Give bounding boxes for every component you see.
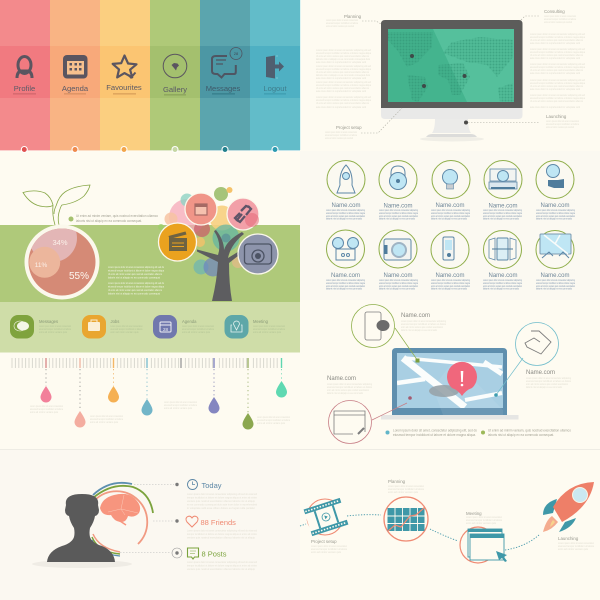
item: jobs <box>82 315 143 338</box>
icon: compact camera <box>379 230 417 268</box>
stat: posts: 8 Posts <box>202 550 227 558</box>
drop: rose <box>40 369 52 403</box>
text block: right column: eiusmod tempor incididunt ut labore et dolore magna aliqua <box>530 65 585 69</box>
text block: paragraph on green: Ut enim ad minim veniam quis nostrud exercitation ullamco <box>108 272 162 276</box>
text block: plant caption: laboris nisi ut aliquip ex ea commodo consequat. <box>76 219 142 223</box>
text block: paragraph on green: eiusmod tempor incididunt ut labore et dolore magna aliqua <box>108 268 164 272</box>
stat: today: in voluptate velit esse cillum dolore eu fugiat nulla pariatur <box>187 506 255 510</box>
item: messages: enim ad minim veniam quis <box>39 330 68 334</box>
map markers <box>410 54 466 88</box>
callout: planning <box>326 14 381 28</box>
menu item: logout <box>263 56 287 95</box>
text block: left column: aute irure dolor in reprehenderit in voluptate velit <box>316 60 366 64</box>
text blocks: icon captions: eiusmod tempor incididunt ut labore dolore magna <box>431 211 470 215</box>
callout: launching <box>464 114 579 129</box>
text blocks: icon captions: Lorem ipsum dolor sit amet consectetur adipiscing <box>536 278 575 282</box>
menu item: messages <box>206 48 242 95</box>
text block: left column: eiusmod tempor incididunt ut labore et dolore magna aliqua <box>316 51 371 55</box>
text block: left column: eiusmod tempor incididunt ut labore et dolore magna aliqua <box>316 98 371 102</box>
text block: left column: eiusmod tempor incididunt ut labore et dolore magna aliqua <box>316 83 371 87</box>
text blocks: drop captions: enim ad minim veniam quis <box>257 421 286 425</box>
callout: launching: Lorem ipsum dolor sit amet consectetur <box>546 119 579 123</box>
text blocks: icon captions: enim ad minim veniam quis nostrud exercitation <box>326 214 365 218</box>
head silhouette <box>32 494 132 568</box>
drop: green <box>242 369 254 430</box>
text block: legend captions: Lorem ipsum dolor sit amet, consectetur adipiscing elit, sed do <box>393 428 477 432</box>
label: name 9: Name.com <box>488 273 518 279</box>
tree icon: camera <box>238 234 278 274</box>
step: project setup <box>304 498 348 554</box>
item: messages <box>10 315 71 338</box>
text block: name right: Name.com <box>526 370 555 376</box>
text block: right column: Lorem ipsum dolor sit amet consectetur adipiscing elit sed <box>530 78 585 82</box>
drop: orange <box>108 369 119 403</box>
step: planning: eiusmod tempor incididunt ut labore <box>388 487 424 491</box>
text blocks: icon captions: eiusmod tempor incididunt ut labore dolore magna <box>536 281 575 285</box>
callout: project setup <box>325 108 402 140</box>
text block: legend captions: laboris nisi ut aliquip ex ea commodo consequat. <box>488 433 554 437</box>
text block: paragraph on green <box>108 265 164 296</box>
callout: planning: Planning <box>344 14 362 19</box>
item: messages: Lorem ipsum dolor sit amet consectetur <box>39 324 71 328</box>
icon: padlock <box>379 160 417 198</box>
icon: reel recorder <box>326 230 364 268</box>
text blocks: icon captions: enim ad minim veniam quis nostrud exercitation <box>431 284 470 288</box>
text block: left column: aute irure dolor in reprehenderit in voluptate velit <box>316 76 366 80</box>
text block: left column: Ut enim ad minim veniam quis nostrud exercitation ullamco <box>316 54 369 58</box>
text blocks: drop captions: eiusmod tempor incididunt ut labore <box>30 407 63 411</box>
tree icon: link <box>227 198 259 230</box>
timeline ruler <box>12 358 277 368</box>
text block: legend captions: eiusmod tempor incididunt ut labore et dolore magna aliqua. <box>393 433 476 437</box>
text blocks: icon captions: enim ad minim veniam quis nostrud exercitation <box>431 214 470 218</box>
item: meeting: enim ad minim veniam quis <box>253 330 282 334</box>
callout: phone chat <box>352 304 420 362</box>
text block: name right: Lorem ipsum dolor sit amet consectetur adipiscing <box>526 376 571 380</box>
text block: left column: Ut enim ad minim veniam quis nostrud exercitation ullamco <box>316 70 369 74</box>
menu item: profile <box>13 56 36 95</box>
text block: right column: Ut enim ad minim veniam quis nostrud exercitation ullamco <box>530 53 583 57</box>
text block: plant caption <box>68 214 158 223</box>
label: name 7: Name.com <box>383 273 413 279</box>
menu item: logout: Logout <box>263 84 287 93</box>
tree trunk and branches <box>197 230 244 301</box>
label: name 6: Name.com <box>331 273 360 279</box>
panel: rocket process <box>300 479 594 563</box>
label: name 8: Name.com <box>435 273 465 279</box>
menu item: favourites: Favourites <box>106 83 142 92</box>
text block: name right: laboris nisi ut aliquip ex ea commodo <box>526 385 562 389</box>
menu markers <box>21 146 278 152</box>
text blocks: icon captions: laboris nisi ut aliquip ex ea commodo <box>431 286 467 290</box>
text block: name left: Lorem ipsum dolor sit amet consectetur adipiscing <box>327 382 372 386</box>
text block: name top: eiusmod tempor incididunt ut labore et dolore <box>401 322 446 326</box>
stat: today: tempor incididunt ut labore et dolore magna aliqua ut enim ad minim <box>187 496 257 500</box>
text block: name left: eiusmod tempor incididunt ut labore et dolore <box>327 385 372 389</box>
drop: peach <box>74 369 86 428</box>
text block: right column: eiusmod tempor incididunt ut labore et dolore magna aliqua <box>530 96 585 100</box>
callout: project setup: enim ad minim veniam quis nostrud <box>325 136 353 140</box>
icon: tablet map <box>536 230 574 268</box>
panel: drop timeline <box>12 358 290 430</box>
text block: paragraph on green: laboris nisi ut aliquip ex ea commodo consequat <box>108 276 160 280</box>
item: jobs: Jobs <box>110 319 119 324</box>
stat: friends: veniam quis nostrud exercitation ullamco laboris nisi ut aliquip <box>187 536 256 540</box>
step: project setup: enim ad minim veniam quis <box>311 550 342 554</box>
step: meeting: Meeting <box>466 511 482 516</box>
item: jobs: eiusmod tempor incididunt ut labore <box>110 327 143 331</box>
stat: today: Today <box>202 481 222 490</box>
text block: left column: Lorem ipsum dolor sit amet consectetur adipiscing elit sed <box>316 48 371 52</box>
step: launching rocket: Launching <box>558 536 579 541</box>
callout: project setup: eiusmod tempor incididunt ut labore <box>325 133 357 137</box>
callout: browser link <box>328 396 412 444</box>
text blocks: icon captions: enim ad minim veniam quis nostrud exercitation <box>483 214 522 218</box>
stat: friends: tempor incididunt ut labore et dolore magna aliqua ut enim ad minim <box>187 532 257 536</box>
callout: project setup: Project setup <box>336 125 362 130</box>
step: launching rocket: eiusmod tempor incididunt ut labore <box>558 544 594 548</box>
text blocks: icon captions <box>326 208 575 290</box>
text block: name right <box>526 370 571 389</box>
text block: name top: enim ad minim veniam quis nostrud exercitation <box>401 325 443 329</box>
text blocks: icon captions: Lorem ipsum dolor sit amet consectetur adipiscing <box>431 208 470 212</box>
item: agenda: Agenda <box>182 319 197 324</box>
callout: project setup: Lorem ipsum dolor sit amet consectetur <box>325 130 357 134</box>
callout: planning: eiusmod tempor incididunt ut labore <box>326 21 358 25</box>
text blocks: drop captions: Lorem ipsum dolor sit amet consectetur <box>90 414 123 418</box>
item: jobs: Lorem ipsum dolor sit amet consectetur <box>110 324 143 328</box>
text block: left column: laboris nisi ut aliquip ex ea commodo consequat duis <box>316 57 371 61</box>
text blocks: icon captions: enim ad minim veniam quis nostrud exercitation <box>483 284 522 288</box>
step: planning <box>384 479 428 541</box>
callout: consulting: eiusmod tempor incididunt ut labore <box>544 17 576 21</box>
text blocks: icon captions: laboris nisi ut aliquip ex ea commodo <box>379 216 415 220</box>
stat: friends: 88 Friends <box>200 518 236 527</box>
text blocks: icon captions: enim ad minim veniam quis nostrud exercitation <box>536 214 575 218</box>
text block: plant caption: Ut enim ad minim veniam, quis nostrud exercitation ullamco <box>76 214 158 218</box>
text block: left column: Lorem ipsum dolor sit amet consectetur adipiscing elit sed <box>316 95 371 99</box>
text blocks: drop captions: eiusmod tempor incididunt ut labore <box>90 417 123 421</box>
text blocks: icon captions: Lorem ipsum dolor sit amet consectetur adipiscing <box>326 208 365 212</box>
text blocks: drop captions: eiusmod tempor incididunt ut labore <box>257 418 290 422</box>
text block: right column <box>530 32 585 109</box>
step: launching rocket <box>543 482 594 551</box>
text block: paragraph on green: Lorem ipsum dolor sit amet consectetur adipiscing elit sed do <box>108 281 164 285</box>
text block: name left: enim ad minim veniam quis nostrud exercitation <box>327 388 369 392</box>
icon: media player <box>431 230 469 268</box>
panel: plant and tree infographic <box>0 185 300 302</box>
step: meeting <box>460 511 507 563</box>
text blocks: icon captions: Lorem ipsum dolor sit amet consectetur adipiscing <box>536 208 575 212</box>
icon: magnifier in hand <box>536 160 574 198</box>
pie chart <box>24 224 100 300</box>
text blocks: icon captions: eiusmod tempor incididunt ut labore dolore magna <box>379 211 418 215</box>
panel: icon grid <box>300 151 600 300</box>
menu item: messages: 28 <box>234 51 239 56</box>
timeline markers <box>46 358 282 368</box>
stat: friends <box>153 516 257 540</box>
item: agenda: Lorem ipsum dolor sit amet consectetur <box>182 324 214 328</box>
text blocks: icon captions: eiusmod tempor incididunt ut labore dolore magna <box>536 211 575 215</box>
callout: launching: eiusmod tempor incididunt ut labore <box>546 122 579 126</box>
text blocks: icon captions: laboris nisi ut aliquip ex ea commodo <box>536 286 572 290</box>
label: name 10: Name.com <box>540 273 570 279</box>
text blocks: icon captions: laboris nisi ut aliquip ex ea commodo <box>483 286 519 290</box>
text blocks: icon captions: enim ad minim veniam quis nostrud exercitation <box>536 284 575 288</box>
stat: posts: tempor incididunt ut labore et dolore magna aliqua ut enim ad minim <box>187 564 257 568</box>
tree bubbles <box>158 187 244 276</box>
panel: desktop monitor with world map <box>300 0 585 150</box>
text blocks: icon captions: Lorem ipsum dolor sit amet consectetur adipiscing <box>379 278 418 282</box>
drop: blue <box>142 369 152 416</box>
label: name 1: Name.com <box>331 203 361 209</box>
text blocks: icon captions: Lorem ipsum dolor sit amet consectetur adipiscing <box>431 278 470 282</box>
text blocks: icon captions: laboris nisi ut aliquip ex ea commodo <box>379 286 415 290</box>
menu item: agenda: Agenda <box>62 84 89 93</box>
text blocks: icon captions: eiusmod tempor incididunt ut labore dolore magna <box>326 281 365 285</box>
alert pin <box>429 362 477 397</box>
drop: mint <box>276 369 287 398</box>
text block: name top: Name.com <box>401 313 430 319</box>
text block: legend captions: Ut enim ad minim veniam, quis nostrud exercitation ullamco <box>488 428 571 432</box>
text block: right column: eiusmod tempor incididunt ut labore et dolore magna aliqua <box>530 35 585 39</box>
step: planning: Lorem ipsum dolor sit amet consectetur <box>388 484 424 488</box>
text blocks: icon captions: laboris nisi ut aliquip ex ea commodo <box>326 286 362 290</box>
menu item: gallery: Gallery <box>163 85 187 94</box>
step: planning: enim ad minim veniam quis <box>388 490 419 494</box>
text block: paragraph on green: eiusmod tempor incididunt ut labore et dolore magna aliqua <box>108 284 164 288</box>
menu item: messages: Messages <box>206 84 241 93</box>
text block: paragraph on green: Lorem ipsum dolor sit amet consectetur adipiscing elit sed do <box>108 265 164 269</box>
text block: right column: aute irure dolor in reprehenderit in voluptate velit <box>530 105 580 109</box>
coloured arcs <box>92 483 153 556</box>
stat: friends: Lorem ipsum dolor sit amet consectetur adipiscing elit sed do eiusmod <box>187 528 257 532</box>
label: name 2: Name.com <box>383 204 413 210</box>
icon: rocket <box>327 160 365 198</box>
stat: today: veniam quis nostrud exercitation ullamco laboris nisi ut aliquip <box>187 499 256 503</box>
pie chart: 34% <box>52 238 68 247</box>
menu item: agenda <box>62 55 89 95</box>
text blocks: drop captions: Lorem ipsum dolor sit amet consectetur <box>257 415 290 419</box>
text block: name top <box>401 313 446 332</box>
label: name 4: Name.com <box>488 204 518 210</box>
monitor <box>381 20 522 142</box>
menu item: gallery <box>163 54 187 96</box>
text block: name left: laboris nisi ut aliquip ex ea commodo <box>327 391 363 395</box>
item: agenda: enim ad minim veniam quis <box>182 330 211 334</box>
text block: name top: Lorem ipsum dolor sit amet consectetur adipiscing <box>401 319 446 323</box>
text block: name top: laboris nisi ut aliquip ex ea commodo <box>401 328 437 332</box>
stat: posts: veniam quis nostrud exercitation ullamco laboris nisi ut aliquip <box>187 567 256 571</box>
text block: left column: Lorem ipsum dolor sit amet consectetur adipiscing elit sed <box>316 64 371 68</box>
text block: right column: eiusmod tempor incididunt ut labore et dolore magna aliqua <box>530 81 585 85</box>
text block: right column: Lorem ipsum dolor sit amet consectetur adipiscing elit sed <box>530 47 585 51</box>
text block: paragraph on green: laboris nisi ut aliquip ex ea commodo consequat <box>108 292 160 296</box>
pie chart: 55% <box>69 271 89 282</box>
text block: paragraph on green: Ut enim ad minim veniam quis nostrud exercitation ullamco <box>108 288 162 292</box>
text blocks: drop captions: Lorem ipsum dolor sit amet consectetur <box>30 404 63 408</box>
text block: right column: aute irure dolor in reprehenderit in voluptate velit <box>530 56 580 60</box>
text blocks: icon captions: laboris nisi ut aliquip ex ea commodo <box>536 216 572 220</box>
stat: posts <box>120 548 257 571</box>
item: meeting: eiusmod tempor incididunt ut labore <box>253 327 285 331</box>
panel: contact strip <box>0 302 300 352</box>
text block: right column: Ut enim ad minim veniam quis nostrud exercitation ullamco <box>530 68 583 72</box>
text blocks: icon captions: eiusmod tempor incididunt ut labore dolore magna <box>483 211 522 215</box>
item: meeting: Lorem ipsum dolor sit amet consectetur <box>253 324 285 328</box>
text blocks: icon captions: Lorem ipsum dolor sit amet consectetur adipiscing <box>326 278 365 282</box>
text block: right column: aute irure dolor in reprehenderit in voluptate velit <box>530 87 580 91</box>
step: meeting: Lorem ipsum dolor sit amet consectetur <box>466 515 502 519</box>
plant sprout <box>23 185 90 225</box>
brain <box>100 494 140 525</box>
text block: name right: enim ad minim veniam quis nostrud exercitation <box>526 382 568 386</box>
text blocks: drop captions: enim ad minim veniam quis <box>90 420 119 424</box>
text block: name left: Name.com <box>327 376 356 382</box>
item: agenda <box>153 315 214 338</box>
text block: right column: Ut enim ad minim veniam quis nostrud exercitation ullamco <box>530 38 583 42</box>
text blocks: icon captions: Lorem ipsum dolor sit amet consectetur adipiscing <box>483 278 522 282</box>
text block: name left <box>327 376 372 395</box>
tree icon: calendar <box>185 193 217 225</box>
callout: consulting <box>521 9 576 24</box>
world map <box>388 32 514 102</box>
callout: consulting: Lorem ipsum dolor sit amet consectetur <box>544 14 576 18</box>
tree icon: clapperboard <box>158 223 196 261</box>
item: meeting <box>224 315 285 338</box>
drop: violet <box>208 369 220 414</box>
stat: today: Lorem ipsum dolor sit amet consectetur adipiscing elit sed do eiusmod <box>187 492 257 496</box>
item: messages: eiusmod tempor incididunt ut labore <box>39 327 71 331</box>
step: launching rocket: enim ad minim veniam quis <box>558 547 589 551</box>
item: meeting: Meeting <box>253 319 269 324</box>
stat: today: ex ea commodo consequat duis aute irure dolor in reprehenderit <box>187 502 257 506</box>
pie chart: 11% <box>35 262 47 269</box>
text block: left column: eiusmod tempor incididunt ut labore et dolore magna aliqua <box>316 67 371 71</box>
text block: right column: Ut enim ad minim veniam quis nostrud exercitation ullamco <box>530 99 583 103</box>
text block: name right: eiusmod tempor incididunt ut labore et dolore <box>526 379 571 383</box>
connecting dotted path <box>300 515 539 550</box>
icon: rotating tablet <box>484 230 522 268</box>
panel: laptop map <box>0 304 600 450</box>
text blocks: icon captions: eiusmod tempor incididunt ut labore dolore magna <box>483 281 522 285</box>
text block: right column: aute irure dolor in reprehenderit in voluptate velit <box>530 41 580 45</box>
text blocks: drop captions: Lorem ipsum dolor sit amet consectetur <box>164 400 197 404</box>
callout: launching: Launching <box>546 114 567 119</box>
text block: left column <box>316 48 371 109</box>
menu item: profile: Profile <box>14 84 35 93</box>
callout: planning: Lorem ipsum dolor sit amet consectetur <box>326 18 358 22</box>
callout: handshake <box>494 322 558 397</box>
callout: planning: enim ad minim veniam quis nostrud <box>326 24 354 28</box>
text block: left column: aute irure dolor in reprehenderit in voluptate velit <box>316 105 366 109</box>
text blocks: icon captions: Lorem ipsum dolor sit amet consectetur adipiscing <box>483 208 522 212</box>
text blocks: icon captions: Lorem ipsum dolor sit amet consectetur adipiscing <box>379 208 418 212</box>
label: name 5: Name.com <box>540 203 570 209</box>
item: messages: Messages <box>39 319 58 324</box>
icon: light bulb <box>432 160 470 198</box>
label: name 3: Name.com <box>435 203 465 209</box>
step: project setup: Project setup <box>311 539 337 544</box>
step: meeting: eiusmod tempor incididunt ut labore <box>466 518 502 522</box>
text block: right column: Ut enim ad minim veniam quis nostrud exercitation ullamco <box>530 84 583 88</box>
item: agenda: 28 <box>163 327 168 332</box>
text blocks: icon captions: enim ad minim veniam quis nostrud exercitation <box>379 284 418 288</box>
text block: legend captions <box>386 428 571 437</box>
text block: right column: aute irure dolor in reprehenderit in voluptate velit <box>530 71 580 75</box>
step: planning: Planning <box>388 479 406 484</box>
stat: posts: Lorem ipsum dolor sit amet consectetur adipiscing elit sed do eiusmod <box>187 560 257 564</box>
item: jobs: enim ad minim veniam quis <box>110 330 139 334</box>
laptop <box>381 348 518 420</box>
text block: left column: Lorem ipsum dolor sit amet consectetur adipiscing elit sed <box>316 80 371 84</box>
stat: today <box>134 480 257 510</box>
text block: left column: Ut enim ad minim veniam quis nostrud exercitation ullamco <box>316 101 369 105</box>
text blocks: drop captions: eiusmod tempor incididunt ut labore <box>164 403 197 407</box>
panel: colour menu <box>0 0 300 152</box>
icon: instant camera <box>484 160 522 198</box>
text blocks: icon captions: laboris nisi ut aliquip ex ea commodo <box>326 216 362 220</box>
text blocks: icon captions: laboris nisi ut aliquip ex ea commodo <box>431 216 467 220</box>
text blocks: icon captions: eiusmod tempor incididunt ut labore dolore magna <box>379 281 418 285</box>
text block: left column: laboris nisi ut aliquip ex ea commodo consequat duis <box>316 73 371 77</box>
step: project setup: eiusmod tempor incididunt ut labore <box>311 547 347 551</box>
text blocks: icon captions: laboris nisi ut aliquip ex ea commodo <box>483 216 519 220</box>
text block: right column: Lorem ipsum dolor sit amet consectetur adipiscing elit sed <box>530 93 585 97</box>
callout: launching: enim ad minim veniam quis nostrud <box>546 125 574 129</box>
step: meeting: enim ad minim veniam quis <box>466 521 497 525</box>
text block: left column: Ut enim ad minim veniam quis nostrud exercitation ullamco <box>316 86 369 90</box>
text block: right column: eiusmod tempor incididunt ut labore et dolore magna aliqua <box>530 50 585 54</box>
text blocks: icon captions: eiusmod tempor incididunt ut labore dolore magna <box>326 211 365 215</box>
callout: consulting: Consulting <box>544 9 565 14</box>
menu item: favourites <box>106 56 142 95</box>
text blocks: icon captions: enim ad minim veniam quis nostrud exercitation <box>379 214 418 218</box>
text blocks: icon captions: enim ad minim veniam quis nostrud exercitation <box>326 284 365 288</box>
text blocks: drop captions: enim ad minim veniam quis <box>164 406 193 410</box>
item: agenda: eiusmod tempor incididunt ut labore <box>182 327 214 331</box>
panel: brain profile <box>0 450 300 600</box>
step: project setup: Lorem ipsum dolor sit amet consectetur <box>311 544 347 548</box>
text block: left column: aute irure dolor in reprehenderit in voluptate velit <box>316 89 366 93</box>
text blocks: drop captions: enim ad minim veniam quis <box>30 410 59 414</box>
text blocks: icon captions: eiusmod tempor incididunt ut labore dolore magna <box>431 281 470 285</box>
text blocks: drop captions <box>30 400 290 425</box>
text block: right column: Lorem ipsum dolor sit amet consectetur adipiscing elit sed <box>530 32 585 36</box>
text block: right column: Lorem ipsum dolor sit amet consectetur adipiscing elit sed <box>530 62 585 66</box>
callout: consulting: enim ad minim veniam quis nostrud <box>544 20 572 24</box>
